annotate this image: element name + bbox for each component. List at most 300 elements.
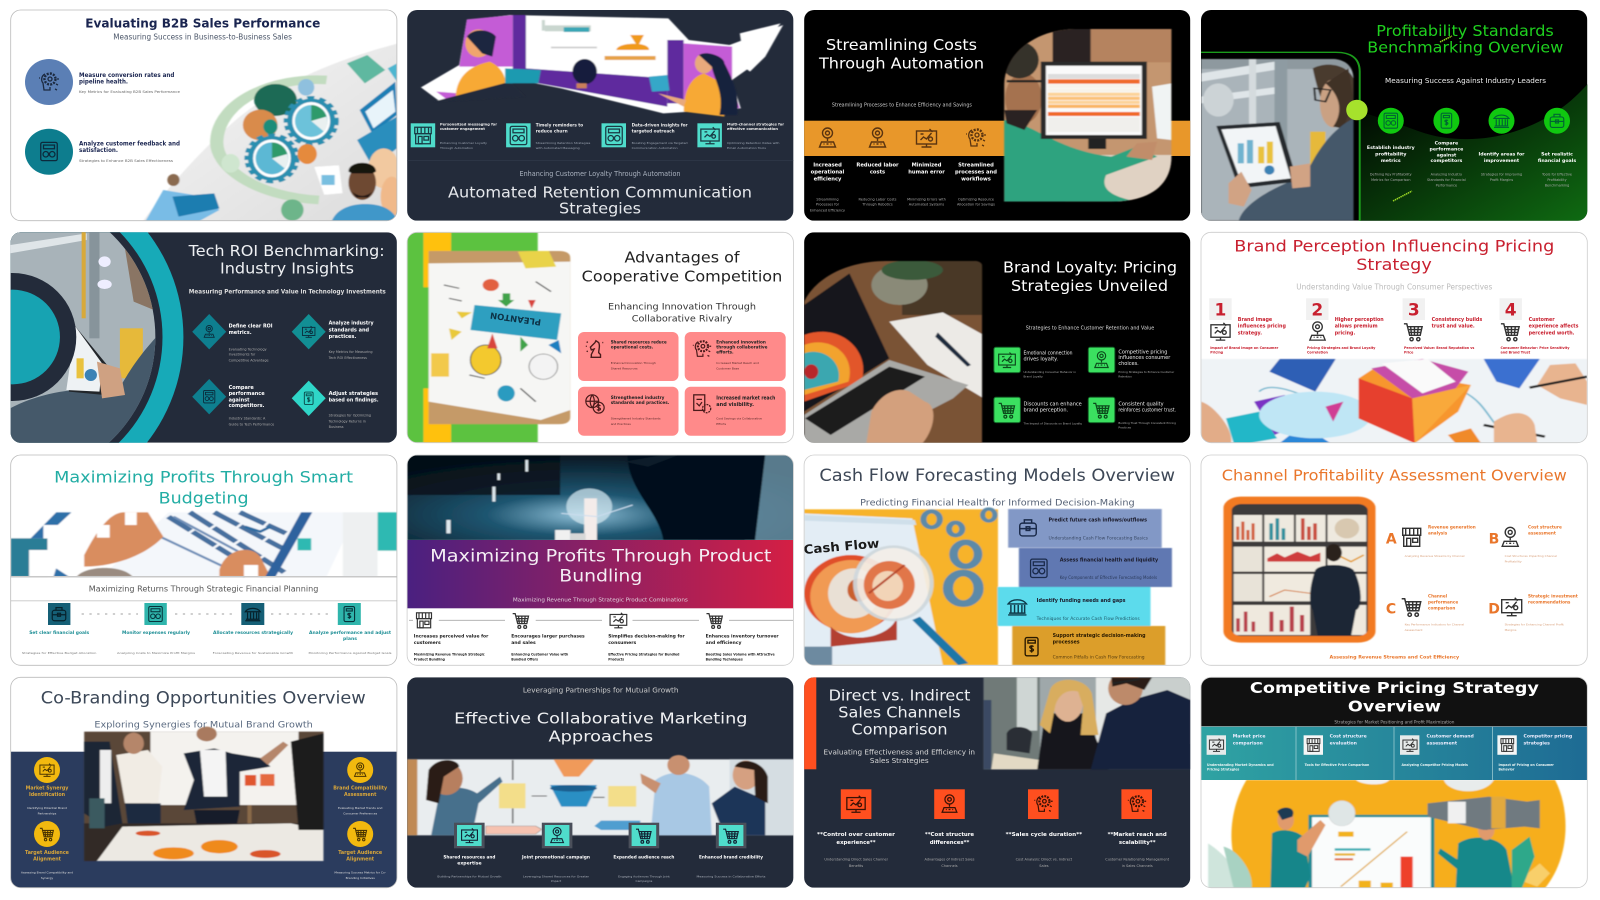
item: timely reminders: reduce churn	[536, 129, 568, 135]
subtitle: Strategies for Market Positioning and Profit Maximization	[1334, 720, 1455, 725]
item: analyze performance	[308, 603, 392, 655]
card: increased market reach: Increased market reach	[716, 396, 776, 402]
item: target audience right: Branding Initiatives	[346, 876, 375, 880]
item: expanded reach: Engaging Audiences Through Joint	[618, 874, 670, 878]
item: simplifies decisions: Effective Pricing Strategies for Bundled	[608, 653, 680, 657]
image: analyst at spreadsheet monitor	[1000, 29, 1172, 202]
title	[818, 36, 984, 72]
item: cost structure: Advantages of Indirect Sales	[924, 857, 975, 861]
card: strengthened standards	[578, 387, 678, 436]
step: predict cash	[1020, 517, 1148, 541]
card: strengthened standards: and Practices	[611, 422, 631, 426]
item: shared resources: Building Partnerships for Mutual Growth	[437, 874, 501, 878]
panel: Brand Perception Influencing Pricing Strategy	[1201, 232, 1589, 444]
card: increased market reach: Cost Savings via Collaborative	[716, 417, 762, 421]
item: multi-channel strategies: Multi-channel strategies for	[727, 122, 784, 126]
card: increased market reach	[685, 387, 786, 436]
item: market reach: scalability**	[1119, 840, 1156, 846]
item: analyze performance: Monitoring Performance Against Budget Goals	[308, 651, 392, 655]
item: data-driven insights	[602, 122, 688, 150]
step: identify funding: Techniques for Accurate Cash Flow Predictions	[1036, 616, 1140, 621]
title: Effective Collaborative Marketing	[454, 709, 748, 727]
item: market reach: in Sales Channels	[1122, 864, 1153, 868]
item: minimized error: Minimizing Errors with	[907, 197, 946, 201]
item: brand compatibility: Brand Compatibility	[333, 785, 388, 791]
item: streamlined workflows: Allocation for Savings	[957, 203, 995, 207]
item: competitive pricing: Competitive pricing	[1118, 350, 1168, 356]
item: allocate resources: Allocate resources strategically	[213, 630, 293, 636]
item: market reach: **Market reach and	[1108, 832, 1167, 838]
item: brand compatibility: Assessment	[344, 792, 377, 798]
panel: Evaluating B2B Sales Performance	[11, 10, 403, 221]
band: gradient title strip	[407, 540, 793, 608]
item 2: pricing.	[1335, 331, 1355, 337]
item 2: Higher perception	[1335, 317, 1384, 323]
item C	[1386, 593, 1464, 632]
item 4: Customer	[1529, 317, 1555, 323]
subtitle: Leveraging Partnerships for Mutual Growth	[523, 686, 678, 694]
item: establish metrics	[1367, 108, 1415, 182]
item 4	[1500, 298, 1579, 355]
item: define ROI metrics	[192, 314, 273, 362]
title: Streamlining Costs	[826, 36, 977, 54]
item 1: influences pricing	[1238, 324, 1286, 330]
item: larger purchases: Encourages larger purchases	[511, 634, 585, 640]
item 3: 3	[1408, 301, 1420, 321]
item D	[1488, 593, 1578, 632]
item: increased efficiency: Enhanced Efficiency	[810, 208, 845, 212]
item: cost structure: **Cost structure	[925, 832, 974, 838]
item: brand compatibility: Consumer Preferences	[343, 812, 378, 816]
item: personalized messaging: customer engagement	[440, 126, 485, 131]
item: consistent quality	[1088, 397, 1176, 430]
item D: Margins	[1505, 628, 1517, 632]
item: inventory turnover: Bundling Techniques	[706, 657, 743, 661]
item: increased efficiency: efficiency	[814, 176, 842, 182]
item: data-driven insights: targeted outreach	[632, 129, 675, 135]
title	[454, 709, 748, 746]
text block: analyze feedback: satisfaction.	[79, 147, 118, 154]
item: inventory turnover	[706, 614, 779, 661]
item: compare performance: Performance	[1436, 184, 1457, 188]
item: larger purchases: Enhancing Customer Value with	[511, 653, 569, 657]
item: market synergy: Market Synergy	[26, 785, 69, 791]
item: increased efficiency	[810, 128, 845, 212]
item: expanded reach	[613, 823, 674, 883]
title: Co-Branding Opportunities Overview	[41, 688, 366, 707]
item: target audience left: Assessing Brand Compatibility and	[21, 870, 73, 874]
item: market price: Pricing Strategies	[1207, 768, 1239, 772]
panel: Direct vs Indirect Sales Channels	[804, 672, 1191, 888]
title: Direct vs. Indirect	[829, 687, 971, 705]
title: Channel Profitability Assessment Overview	[1222, 467, 1567, 485]
title	[54, 468, 353, 507]
item: competitive pricing: Retention	[1118, 375, 1132, 379]
card: strengthened standards: standards and practices.	[611, 400, 670, 405]
subtitle: Maximizing Revenue Through Strategic Product Combinations	[513, 597, 688, 603]
item: customer experience: experience**	[836, 840, 876, 846]
title: Sales Channels	[838, 704, 961, 722]
subtitle: Enhancing Customer Loyalty Through Automation	[520, 170, 680, 178]
item: discounts: The Impact of Discounts on Brand Loyalty	[1022, 421, 1082, 425]
image: man viewing chart wall in orange frame	[1223, 497, 1376, 643]
subtitle: Maximizing Returns Through Strategic Financial Planning	[89, 585, 319, 594]
icon circle: conversion metrics	[25, 59, 73, 105]
item: inventory turnover: Boosting Sales Volume with Attractive	[706, 653, 775, 657]
item: sales cycle: **Sales cycle duration**	[1006, 832, 1082, 838]
panel: Co-Branding Opportunities	[11, 677, 397, 888]
item: market price: Understanding Market Dynamics and	[1207, 763, 1274, 767]
item: inventory turnover: Enhances inventory turnover	[706, 634, 779, 640]
item: increased efficiency: Increased	[813, 163, 842, 169]
item: market reach: Customer Relationship Management	[1105, 857, 1170, 861]
item: compare performance: performance	[1430, 146, 1463, 152]
image: branding materials and hands	[1201, 359, 1589, 444]
item 1: strategy.	[1238, 331, 1262, 337]
subtitle: Measuring Success Against Industry Leaders	[1385, 77, 1546, 85]
item: analyze standards: standards and	[329, 327, 370, 333]
item: emotional connection	[994, 347, 1076, 379]
item: identify improvement: Identify areas for	[1478, 152, 1525, 158]
item: analyze standards: practices.	[329, 334, 356, 340]
panel: Maximizing Profits Through Smart Budgeting	[11, 455, 397, 665]
item: customer demand	[1400, 734, 1474, 767]
item: target audience left: Target Audience	[25, 850, 70, 856]
image: team with chart and megaphone	[1208, 780, 1566, 889]
item: data-driven insights: Data-driven insights for	[632, 122, 688, 128]
title: Tech ROI Benchmarking:	[188, 242, 385, 260]
title	[1234, 236, 1554, 274]
item: market synergy: Identification	[29, 792, 66, 798]
item: target audience right: Alignment	[346, 856, 375, 862]
item: set goals: financial goals	[1538, 158, 1576, 164]
step: support decisions: Support strategic decision-making	[1053, 633, 1146, 639]
card border	[407, 232, 793, 443]
item: brand credibility: Enhanced brand credibility	[699, 855, 763, 861]
item: define ROI metrics: Competitive Advantage	[229, 358, 269, 362]
item: allocate resources: Forecasting Revenue for Sustainable Growth	[213, 651, 293, 655]
item: emotional connection: Brand Loyalty	[1024, 375, 1043, 379]
item: simplifies decisions: consumers	[608, 640, 637, 646]
step: support decisions: processes	[1053, 640, 1080, 646]
card: enhanced innovation: Customer Base	[716, 366, 739, 370]
green swoosh background	[1201, 52, 1588, 221]
item: customer demand: Customer demand	[1426, 734, 1474, 740]
card: increased market reach: Efforts	[716, 422, 727, 426]
item: cost structure: Cost structure	[1330, 734, 1367, 740]
card border	[1201, 677, 1587, 888]
item: reduced labor: Reduced labor	[856, 163, 899, 169]
item: market price: comparison	[1233, 740, 1263, 746]
subtitle: Strategies to Enhance Customer Retention and Value	[1026, 326, 1154, 332]
item B: Cost Structures Impacting Channel	[1505, 554, 1557, 558]
item: discounts: brand perception.	[1024, 408, 1068, 414]
item: simplifies decisions: Simplifies decision-making for	[608, 634, 685, 640]
step: support decisions: Common Pitfalls in Cash Flow Forecasting	[1053, 654, 1145, 659]
item: compare competitors: performance	[229, 391, 265, 397]
item: joint campaign	[521, 823, 590, 883]
item: define ROI metrics: metrics.	[229, 330, 252, 336]
title: Overview	[1348, 698, 1441, 716]
title: Profitability Standards	[1376, 22, 1554, 40]
item B: Profitability	[1505, 559, 1522, 563]
item: simplifies decisions	[608, 613, 685, 661]
item: identify improvement: improvement	[1484, 158, 1520, 164]
item: analyze standards: Tech ROI Effectiveness	[328, 356, 367, 360]
item: competitive pricing: choices.	[1118, 361, 1139, 367]
item: customer experience: Understanding Direct Sales Channel	[824, 857, 888, 861]
item 3: trust and value.	[1432, 324, 1475, 330]
card: shared resources	[578, 332, 678, 381]
title: Maximizing Profits Through Product	[430, 546, 772, 566]
item: competitor strategies: Behavior	[1498, 768, 1515, 772]
card border	[11, 677, 397, 888]
item 4: and Brand Trust	[1500, 351, 1531, 355]
item A: Analyzing Revenue Streams by Channel	[1405, 554, 1465, 558]
item D: Strategic investment	[1528, 593, 1578, 598]
card: enhanced innovation: Increased Market Reach and	[716, 361, 759, 365]
item 3	[1403, 298, 1482, 355]
text block: analyze feedback: Analyze customer feedback and	[79, 140, 180, 148]
title: Cash Flow Forecasting Models Overview	[819, 466, 1175, 485]
item: set goals: Strategies for Effective Budget Allocation	[22, 651, 97, 655]
item: analyze performance: Analyze performance and adjust	[309, 630, 392, 636]
item: compare competitors: Guide to Tech Performance	[229, 423, 274, 427]
item: personalized messaging: Personalized messaging for	[440, 122, 497, 126]
item: increased efficiency: Streamlining	[816, 197, 839, 201]
item C: C	[1386, 601, 1396, 617]
item: compare competitors: against	[229, 398, 250, 404]
card: shared resources: Shared Resources	[611, 366, 638, 370]
item B	[1489, 525, 1562, 563]
item C: Key Performance Indicators for Channel	[1405, 622, 1464, 626]
item B: B	[1489, 531, 1499, 547]
title: Maximizing Profits Through Smart	[54, 468, 353, 487]
item: shared resources: Shared resources and	[443, 855, 495, 861]
subtitle: Predicting Financial Health for Informed Decision-Making	[860, 499, 1135, 509]
item 2: Pricing Strategies and Brand Loyalty	[1307, 346, 1376, 350]
title	[188, 244, 383, 276]
item: compare competitors	[192, 379, 274, 427]
panel: Advantages of Cooperative Competition	[407, 232, 793, 443]
item 2: allows premium	[1335, 324, 1378, 330]
item: joint campaign: Leveraging Shared Resources for Greater	[523, 874, 590, 878]
panel: Automated Retention Communication Strategies	[407, 10, 793, 221]
item: data-driven insights: Boosting Engagement via Targeted	[632, 141, 688, 145]
item: timely reminders: Timely reminders to	[536, 122, 583, 128]
card: shared resources: Shared resources reduce	[611, 340, 667, 345]
card border	[11, 10, 397, 221]
item: timely reminders: Streamlining Retention Strategies	[536, 141, 591, 145]
item: cost structure: Tools for Effective Price Comparison	[1305, 763, 1370, 767]
item D: Strategies for Enhancing Channel Profit	[1505, 622, 1565, 626]
title: Industry Insights	[220, 259, 354, 277]
item: larger purchases	[511, 614, 585, 661]
title	[1003, 258, 1177, 295]
title	[448, 186, 751, 216]
subtitle: Exploring Synergies for Mutual Brand Growth	[94, 721, 313, 731]
item: perceived value: Increases perceived value for	[414, 634, 489, 640]
item 1	[1209, 298, 1286, 355]
item: market price	[1207, 734, 1274, 772]
image label: Cash Flow: Cash Flow	[803, 535, 880, 557]
item: larger purchases: and sales	[511, 640, 536, 646]
item: competitor strategies: Impact of Pricing on Consumer	[1498, 763, 1554, 767]
step: assess health: Key Components of Effective Forecasting Models	[1060, 575, 1157, 580]
subtitle: Sales Strategies	[870, 757, 929, 765]
item: establish metrics: Defining Key Profitability	[1370, 172, 1412, 176]
item: target audience right: Measuring Success Metrics for Co-	[334, 870, 386, 874]
item: market synergy	[26, 757, 69, 816]
item: streamlined workflows: workflows	[961, 176, 991, 182]
item: streamlined workflows	[955, 130, 997, 207]
item 1: 1	[1214, 301, 1226, 321]
item C: Channel	[1428, 593, 1448, 598]
panel: Brand Loyalty Pricing Strategies	[800, 232, 1190, 445]
image: cash flow target and magnifier	[804, 509, 1172, 665]
step: assess health: Assess financial health and liquidity	[1060, 557, 1159, 563]
item 3: Perceived Value: Brand Reputation vs	[1404, 346, 1474, 350]
item: timely reminders	[506, 122, 591, 150]
card: increased market reach: and visibility.	[716, 402, 754, 408]
image: two colleagues at a desk	[984, 672, 1191, 769]
item: emotional connection: Understanding Consumer Behavior in	[1024, 370, 1076, 374]
image: engineer with tablet	[1201, 59, 1354, 221]
item: cost structure	[924, 789, 975, 868]
card: enhanced innovation	[685, 332, 786, 381]
item: perceived value: Maximizing Revenue Through Strategic	[414, 653, 485, 657]
item: target audience left: Alignment	[33, 856, 62, 862]
item: set goals: Benchmarking	[1545, 184, 1569, 188]
card: strengthened standards: Strengthened industry	[611, 395, 665, 400]
subtitle: Measuring Success in Business-to-Business Sales	[113, 33, 292, 42]
card: shared resources: operational costs.	[611, 345, 654, 350]
item: expanded reach: Expanded audience reach	[613, 855, 674, 861]
subtitle: Evaluating Effectiveness and Efficiency in	[824, 749, 975, 757]
orange band	[804, 121, 1190, 156]
subtitle: Measuring Performance and Value in Technology Investments	[189, 290, 386, 296]
item: sales cycle: Sales	[1039, 864, 1049, 868]
item: allocate resources	[213, 603, 293, 655]
image: mind map with green and yellow blocks	[407, 232, 570, 443]
item: adjust strategies: Technology Returns in	[328, 419, 366, 423]
text block: measure conversion: Measure conversion rates and	[79, 72, 174, 79]
title: Brand Perception Influencing Pricing	[1234, 236, 1554, 255]
card border	[1201, 455, 1587, 665]
item: competitor strategies: Competitor pricing	[1524, 734, 1572, 740]
item: identify improvement: Profit Margins	[1490, 178, 1513, 182]
item: adjust strategies: Business	[329, 425, 344, 429]
item: expanded reach: Campaigns	[635, 879, 653, 883]
item C: Assessment	[1405, 628, 1423, 632]
title	[829, 687, 971, 739]
title: Strategies Unveiled	[1011, 277, 1168, 295]
orange accent bar	[804, 677, 816, 769]
step: support decisions	[1025, 633, 1146, 659]
subtitle	[608, 303, 756, 324]
item: consistent quality: Building Trust Through Consistent Pricing	[1118, 421, 1176, 425]
item: brand compatibility	[333, 757, 388, 816]
diagram sign text: PLEANTON	[490, 309, 542, 327]
subtitle	[824, 749, 975, 765]
item: reduced labor: Reducing Labor Costs	[859, 197, 897, 201]
panel: Tech ROI Benchmarking	[10, 232, 397, 443]
image: businessman with glowing chart	[407, 455, 796, 540]
item: reduced labor	[856, 128, 899, 207]
item: identify improvement: Strategies for Improving	[1481, 172, 1522, 176]
item 4: Consumer Behavior: Price Sensitivity	[1500, 346, 1570, 350]
item: establish metrics: profitability	[1375, 152, 1406, 158]
icon circle: customer feedback	[25, 129, 73, 175]
title: Strategy	[1356, 255, 1432, 274]
item: perceived value: Product Bundling	[414, 657, 446, 661]
item: monitor expenses: Monitor expenses regularly	[122, 630, 190, 636]
item: reduced labor: costs	[870, 169, 885, 175]
card: enhanced innovation: Enhanced innovation	[716, 340, 766, 345]
item A: A	[1386, 531, 1397, 547]
item A: analysis	[1428, 531, 1448, 536]
subtitle: Understanding Value Through Consumer Perspectives	[1296, 283, 1492, 292]
title: Competitive Pricing Strategy	[1250, 679, 1539, 697]
item: perceived value	[414, 613, 489, 661]
title	[1250, 679, 1539, 716]
item: inventory turnover: and efficiency	[706, 640, 742, 646]
title: Comparison	[852, 721, 948, 739]
title: Advantages of	[624, 249, 740, 267]
item: set goals	[1538, 108, 1576, 188]
item 4: 4	[1505, 301, 1517, 321]
item: target audience right: Target Audience	[338, 850, 383, 856]
card: enhanced innovation: through collaborative	[716, 345, 768, 350]
title: Budgeting	[159, 488, 249, 507]
image: gears and analytics illustration	[143, 43, 403, 221]
item A	[1386, 525, 1476, 558]
item: sales cycle	[1006, 789, 1082, 868]
item: personalized messaging	[411, 122, 497, 150]
item 2	[1306, 298, 1384, 355]
item: compare performance	[1427, 108, 1466, 188]
text block: measure conversion: pipeline health.	[79, 79, 128, 86]
item: analyze standards: Key Metrics for Measuring	[329, 350, 373, 354]
text block: measure conversion	[79, 72, 181, 94]
card: strengthened standards: Strengthened Industry Standards	[611, 417, 661, 421]
panel: Streamlining Costs Through Automation	[804, 10, 1190, 221]
item: cost structure: Channels	[941, 864, 958, 868]
item: customer demand: assessment	[1426, 740, 1458, 746]
item D: D	[1488, 601, 1500, 617]
text block: measure conversion: Key Metrics for Evaluating B2B Sales Performance	[79, 90, 181, 94]
title: Benchmarking Overview	[1367, 38, 1564, 56]
card border	[1201, 232, 1587, 443]
item: compare performance: against	[1437, 152, 1457, 158]
item C: performance	[1428, 599, 1458, 604]
item: customer experience: **Control over customer	[817, 832, 895, 838]
item: identify improvement	[1478, 108, 1525, 182]
item: minimized error: Automated Systems	[909, 203, 944, 207]
item: compare competitors: Industry Standards: A	[229, 417, 266, 421]
text block: analyze feedback: Strategies to Enhance B2B Sales Effectiveness	[79, 159, 173, 163]
item: competitor strategies: strategies	[1524, 740, 1550, 746]
item: market synergy: Partnerships	[38, 812, 57, 816]
item 1: Impact of Brand Image on Consumer	[1210, 346, 1279, 350]
item: compare performance: competitors	[1430, 158, 1463, 164]
item: shared resources	[437, 823, 501, 878]
item: emotional connection: drives loyalty.	[1024, 357, 1058, 363]
item C: comparison	[1428, 605, 1455, 610]
title: Evaluating B2B Sales Performance	[85, 17, 320, 31]
image: laptop on wooden desk	[800, 258, 984, 445]
item: streamlined workflows: processes and	[955, 169, 997, 175]
